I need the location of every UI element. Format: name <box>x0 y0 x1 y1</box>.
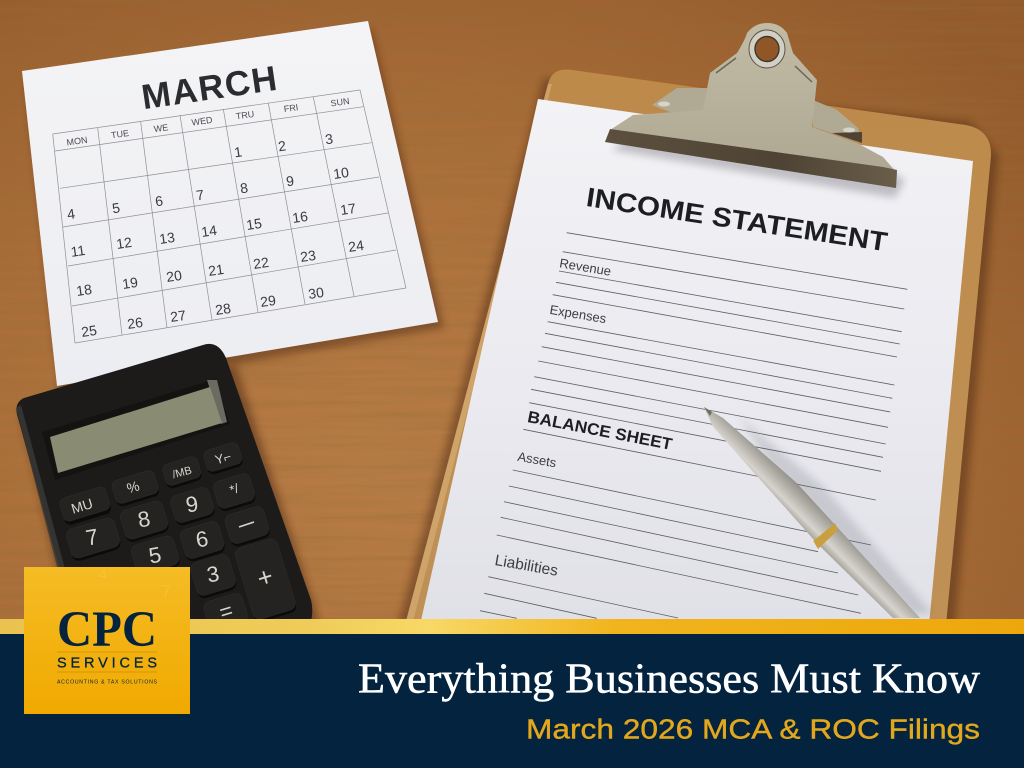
calculator keys: 5 <box>147 542 163 569</box>
calculator keys: Y⌐ <box>213 449 233 467</box>
calendar dates: 20 <box>165 267 183 285</box>
calendar dates: 8 <box>239 179 249 196</box>
calendar dates: 28 <box>214 300 232 318</box>
calendar dates: 29 <box>259 292 277 310</box>
calendar dates: 30 <box>307 284 325 302</box>
calendar dates: 5 <box>111 199 121 216</box>
calendar dates: 11 <box>70 242 87 260</box>
calendar dates: 22 <box>252 254 270 272</box>
calendar dates: 25 <box>80 322 98 340</box>
calendar dates: 21 <box>207 261 225 279</box>
calendar dates: 19 <box>121 274 139 292</box>
calculator keys <box>58 441 298 632</box>
logo tagline: ACCOUNTING & TAX SOLUTIONS <box>57 680 158 686</box>
calendar weekday headers: FRI <box>283 102 299 114</box>
pen gold ring <box>813 523 838 549</box>
calendar dates: 23 <box>299 247 317 265</box>
calculator keys: */ <box>228 480 241 497</box>
logo word SERVICES: SERVICES <box>57 655 157 671</box>
calendar dates: 10 <box>332 164 350 182</box>
main title: Everything Businesses Must Know <box>358 656 981 702</box>
calendar dates: 14 <box>200 222 218 240</box>
label: expenses: Expenses <box>549 302 608 326</box>
calendar dates: 26 <box>126 314 144 332</box>
calendar dates: 18 <box>75 281 93 299</box>
calculator keys: + <box>253 561 277 594</box>
label: assets: Assets <box>516 449 558 470</box>
calculator keys: 6 <box>194 526 210 553</box>
calendar dates: 9 <box>285 172 295 189</box>
calendar dates: 13 <box>158 229 176 247</box>
ruled lines <box>480 233 907 618</box>
calendar dates: 16 <box>291 208 309 226</box>
logo: CPC Services: 7 <box>161 582 171 602</box>
calendar weekday headers <box>66 96 350 148</box>
calculator keys: 9 <box>184 491 200 518</box>
calculator keys: /MB <box>171 464 193 481</box>
logo: CPC Services <box>24 566 190 714</box>
calendar dates: 6 <box>154 192 164 209</box>
calendar dates: 1 <box>233 143 243 160</box>
calculator <box>16 344 320 632</box>
calendar sheet <box>22 21 444 394</box>
clipboard <box>398 23 998 625</box>
calendar month heading: MARCH <box>139 59 279 117</box>
silver pen <box>704 407 933 618</box>
calendar dates <box>66 130 365 340</box>
calendar dates: 7 <box>195 186 205 203</box>
calculator keys: MU <box>69 495 95 517</box>
label: liabilities: Liabilities <box>493 552 559 580</box>
calendar dates: 2 <box>277 137 287 154</box>
calendar weekday headers: TRU <box>235 109 255 121</box>
calculator keys: % <box>125 477 141 496</box>
logo wordmark CPC: CPC <box>57 602 157 658</box>
calculator keys: 3 <box>205 561 221 588</box>
calendar weekday headers: MON <box>66 135 88 148</box>
calendar dates: 12 <box>115 234 133 252</box>
calendar dates: 17 <box>339 200 357 218</box>
calendar dates: 3 <box>324 130 334 147</box>
income statement heading: INCOME STATEMENT <box>584 182 890 257</box>
calculator keys: 7 <box>84 524 100 551</box>
calculator display <box>42 379 230 480</box>
logo: CPC Services: 4 <box>99 566 107 582</box>
calendar weekday headers: SUN <box>330 96 350 108</box>
calendar weekday headers: WED <box>191 115 214 128</box>
calendar weekday headers: TUE <box>110 128 130 140</box>
calendar grid <box>53 90 406 343</box>
calculator keys: = <box>216 597 236 625</box>
income statement paper <box>420 99 973 625</box>
calendar dates: 4 <box>66 205 76 222</box>
gold accent band <box>0 619 1024 634</box>
label: revenue: Revenue <box>558 255 612 279</box>
calculator keys: 8 <box>136 506 152 533</box>
calendar dates: 24 <box>347 237 365 255</box>
metal clip <box>605 23 905 198</box>
navy footer band <box>0 634 1024 768</box>
balance sheet heading: BALANCE SHEET <box>526 408 674 454</box>
calendar dates: 27 <box>169 307 187 325</box>
calendar weekday headers: WE <box>153 122 169 134</box>
calendar dates: 15 <box>245 215 263 233</box>
subtitle: March 2026 MCA & ROC Filings <box>526 714 980 744</box>
